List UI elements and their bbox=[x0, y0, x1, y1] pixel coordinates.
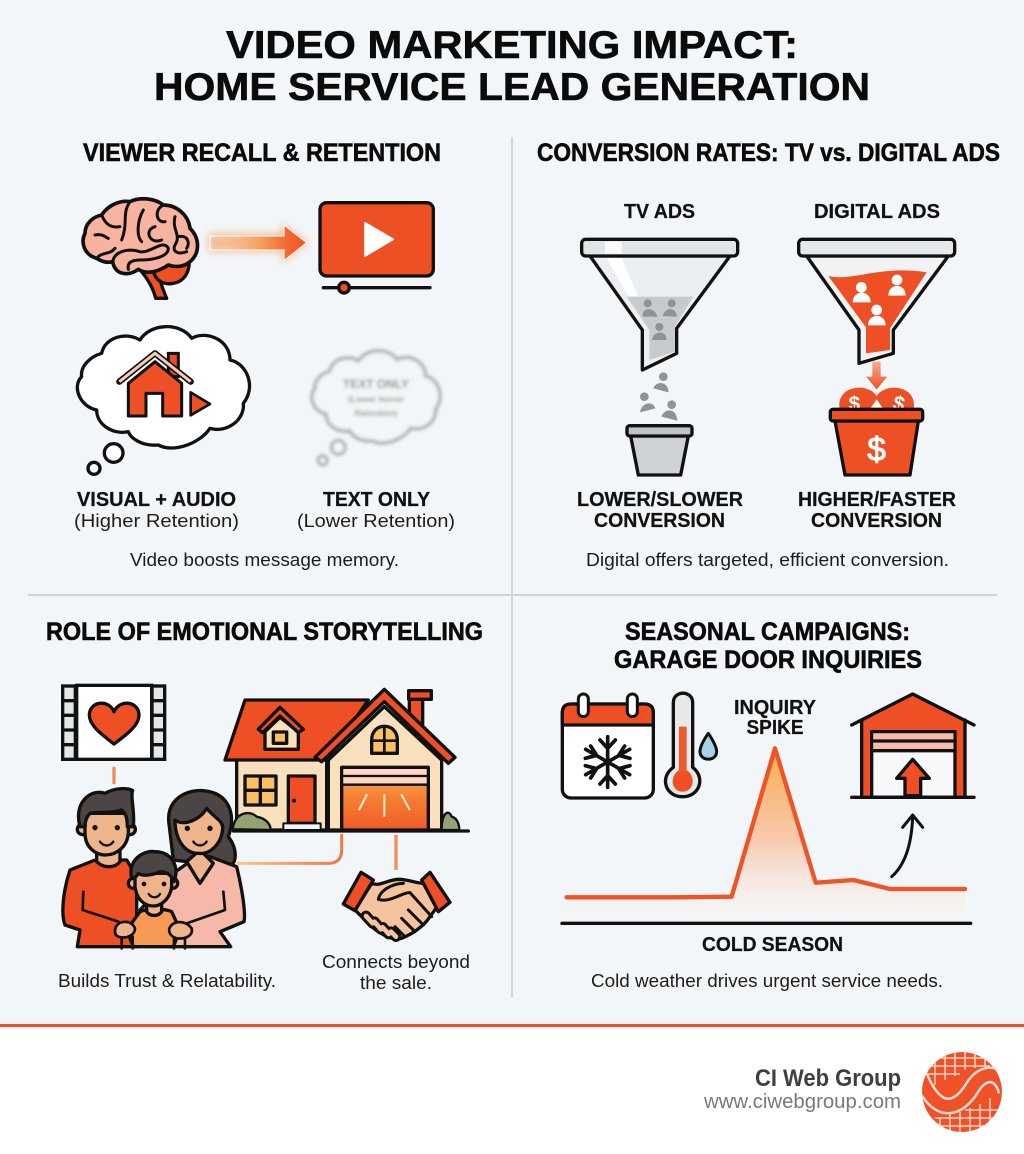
connector: house to family bbox=[237, 834, 342, 863]
icon: film frame with heart bbox=[63, 685, 165, 759]
label: visual plus audio bbox=[74, 489, 239, 531]
label: higher faster conversion: HIGHER/FASTER bbox=[798, 489, 957, 511]
icon: brand logo bbox=[922, 1052, 1002, 1132]
icon: money bucket with hearts: $ bbox=[891, 392, 907, 417]
title bbox=[154, 24, 870, 109]
icon: money bucket with hearts: $ bbox=[849, 393, 861, 416]
icon: brain bbox=[83, 199, 197, 298]
icon: tv bucket bbox=[627, 426, 692, 475]
icon: thermometer bbox=[665, 693, 700, 797]
caption: video boosts memory: Video boosts message memory. bbox=[130, 550, 399, 570]
label: text only: TEXT ONLY bbox=[323, 489, 431, 511]
caption: builds trust: Builds Trust & Relatability. bbox=[58, 971, 276, 991]
icon: money bucket with hearts: $ bbox=[867, 432, 886, 469]
icon: faded text-only cloud: TEXT ONLY bbox=[343, 377, 409, 391]
panel: conversion rates bbox=[537, 139, 1000, 570]
footer brand text: CI Web Group bbox=[755, 1065, 901, 1092]
icon: tv funnel bbox=[582, 239, 738, 421]
label: lower slower conversion: CONVERSION bbox=[594, 510, 725, 532]
icons: recall illustrations bbox=[77, 199, 440, 474]
label: text only: (Lower Retention) bbox=[297, 511, 455, 531]
icon: garage bbox=[852, 694, 974, 797]
icons: storytelling illustration bbox=[63, 685, 468, 948]
heading: viewer recall: VIEWER RECALL & RETENTION bbox=[83, 139, 441, 167]
icon: faded text-only cloud: (Lower Itorrer bbox=[348, 394, 405, 404]
arrow: recall to video bbox=[208, 223, 308, 263]
connector: film to family bbox=[109, 768, 119, 783]
panel: viewer recall and retention bbox=[74, 139, 455, 570]
icon: family bbox=[63, 789, 244, 948]
icon: water drop bbox=[700, 733, 717, 759]
woman bbox=[140, 791, 244, 947]
heading: seasonal campaigns bbox=[614, 618, 922, 674]
icons: funnels and buckets bbox=[582, 239, 955, 475]
arrow: chart to garage bbox=[892, 815, 923, 877]
label: tv ads: TV ADS bbox=[624, 201, 695, 223]
label: higher faster conversion bbox=[798, 489, 957, 532]
panel: seasonal campaigns bbox=[562, 618, 974, 991]
label: visual plus audio: VISUAL + AUDIO bbox=[77, 489, 236, 511]
man bbox=[63, 789, 137, 947]
heading: seasonal campaigns: SEASONAL CAMPAIGNS: bbox=[625, 618, 910, 646]
chart: inquiry spike line bbox=[562, 748, 971, 923]
title: HOME SERVICE LEAD GENERATION bbox=[154, 66, 870, 109]
caption: connects beyond the sale bbox=[322, 952, 470, 993]
icon: money bucket with hearts bbox=[830, 388, 923, 475]
label: text only bbox=[297, 489, 455, 531]
label: digital ads: DIGITAL ADS bbox=[814, 201, 940, 223]
connector: house to handshake bbox=[391, 835, 401, 870]
icon: faded text-only cloud bbox=[312, 351, 440, 465]
icon: thought cloud with house bbox=[77, 327, 250, 474]
caption: cold weather: Cold weather drives urgent service needs. bbox=[591, 971, 943, 991]
heading: emotional storytelling: ROLE OF EMOTIONAL STORYTELLING bbox=[46, 618, 483, 646]
label: lower slower conversion bbox=[577, 489, 744, 532]
icon: video player bbox=[320, 203, 433, 293]
footer brand text bbox=[703, 1065, 901, 1113]
caption: digital efficient conversion: Digital offers targeted, efficient conversion. bbox=[586, 550, 949, 570]
footer brand text: www.ciwebgroup.com bbox=[703, 1091, 901, 1113]
title: VIDEO MARKETING IMPACT: bbox=[226, 24, 798, 67]
icon: faded text-only cloud: Retention) bbox=[355, 408, 398, 418]
arrow: funnel to bucket bbox=[866, 362, 887, 389]
label: visual plus audio: (Higher Retention) bbox=[74, 511, 239, 531]
label: inquiry spike: INQUIRY bbox=[734, 697, 817, 719]
caption: connects beyond the sale: Connects beyond bbox=[322, 952, 470, 972]
label: inquiry spike: SPIKE bbox=[746, 717, 804, 739]
label: lower slower conversion: LOWER/SLOWER bbox=[577, 489, 744, 511]
icon: handshake bbox=[343, 872, 450, 939]
label: higher faster conversion: CONVERSION bbox=[811, 510, 942, 532]
heading: seasonal campaigns: GARAGE DOOR INQUIRIES bbox=[614, 646, 922, 674]
panel: emotional storytelling bbox=[46, 618, 483, 993]
label: inquiry spike bbox=[734, 697, 817, 739]
caption: connects beyond the sale: the sale. bbox=[360, 973, 432, 993]
child bbox=[127, 851, 180, 947]
icon: snow calendar bbox=[562, 694, 653, 798]
icon: digital funnel bbox=[799, 239, 955, 363]
hands bbox=[115, 922, 135, 948]
icon: house with glowing garage bbox=[225, 689, 468, 831]
label: cold season: COLD SEASON bbox=[702, 934, 843, 956]
icons: seasonal illustration bbox=[562, 693, 974, 923]
